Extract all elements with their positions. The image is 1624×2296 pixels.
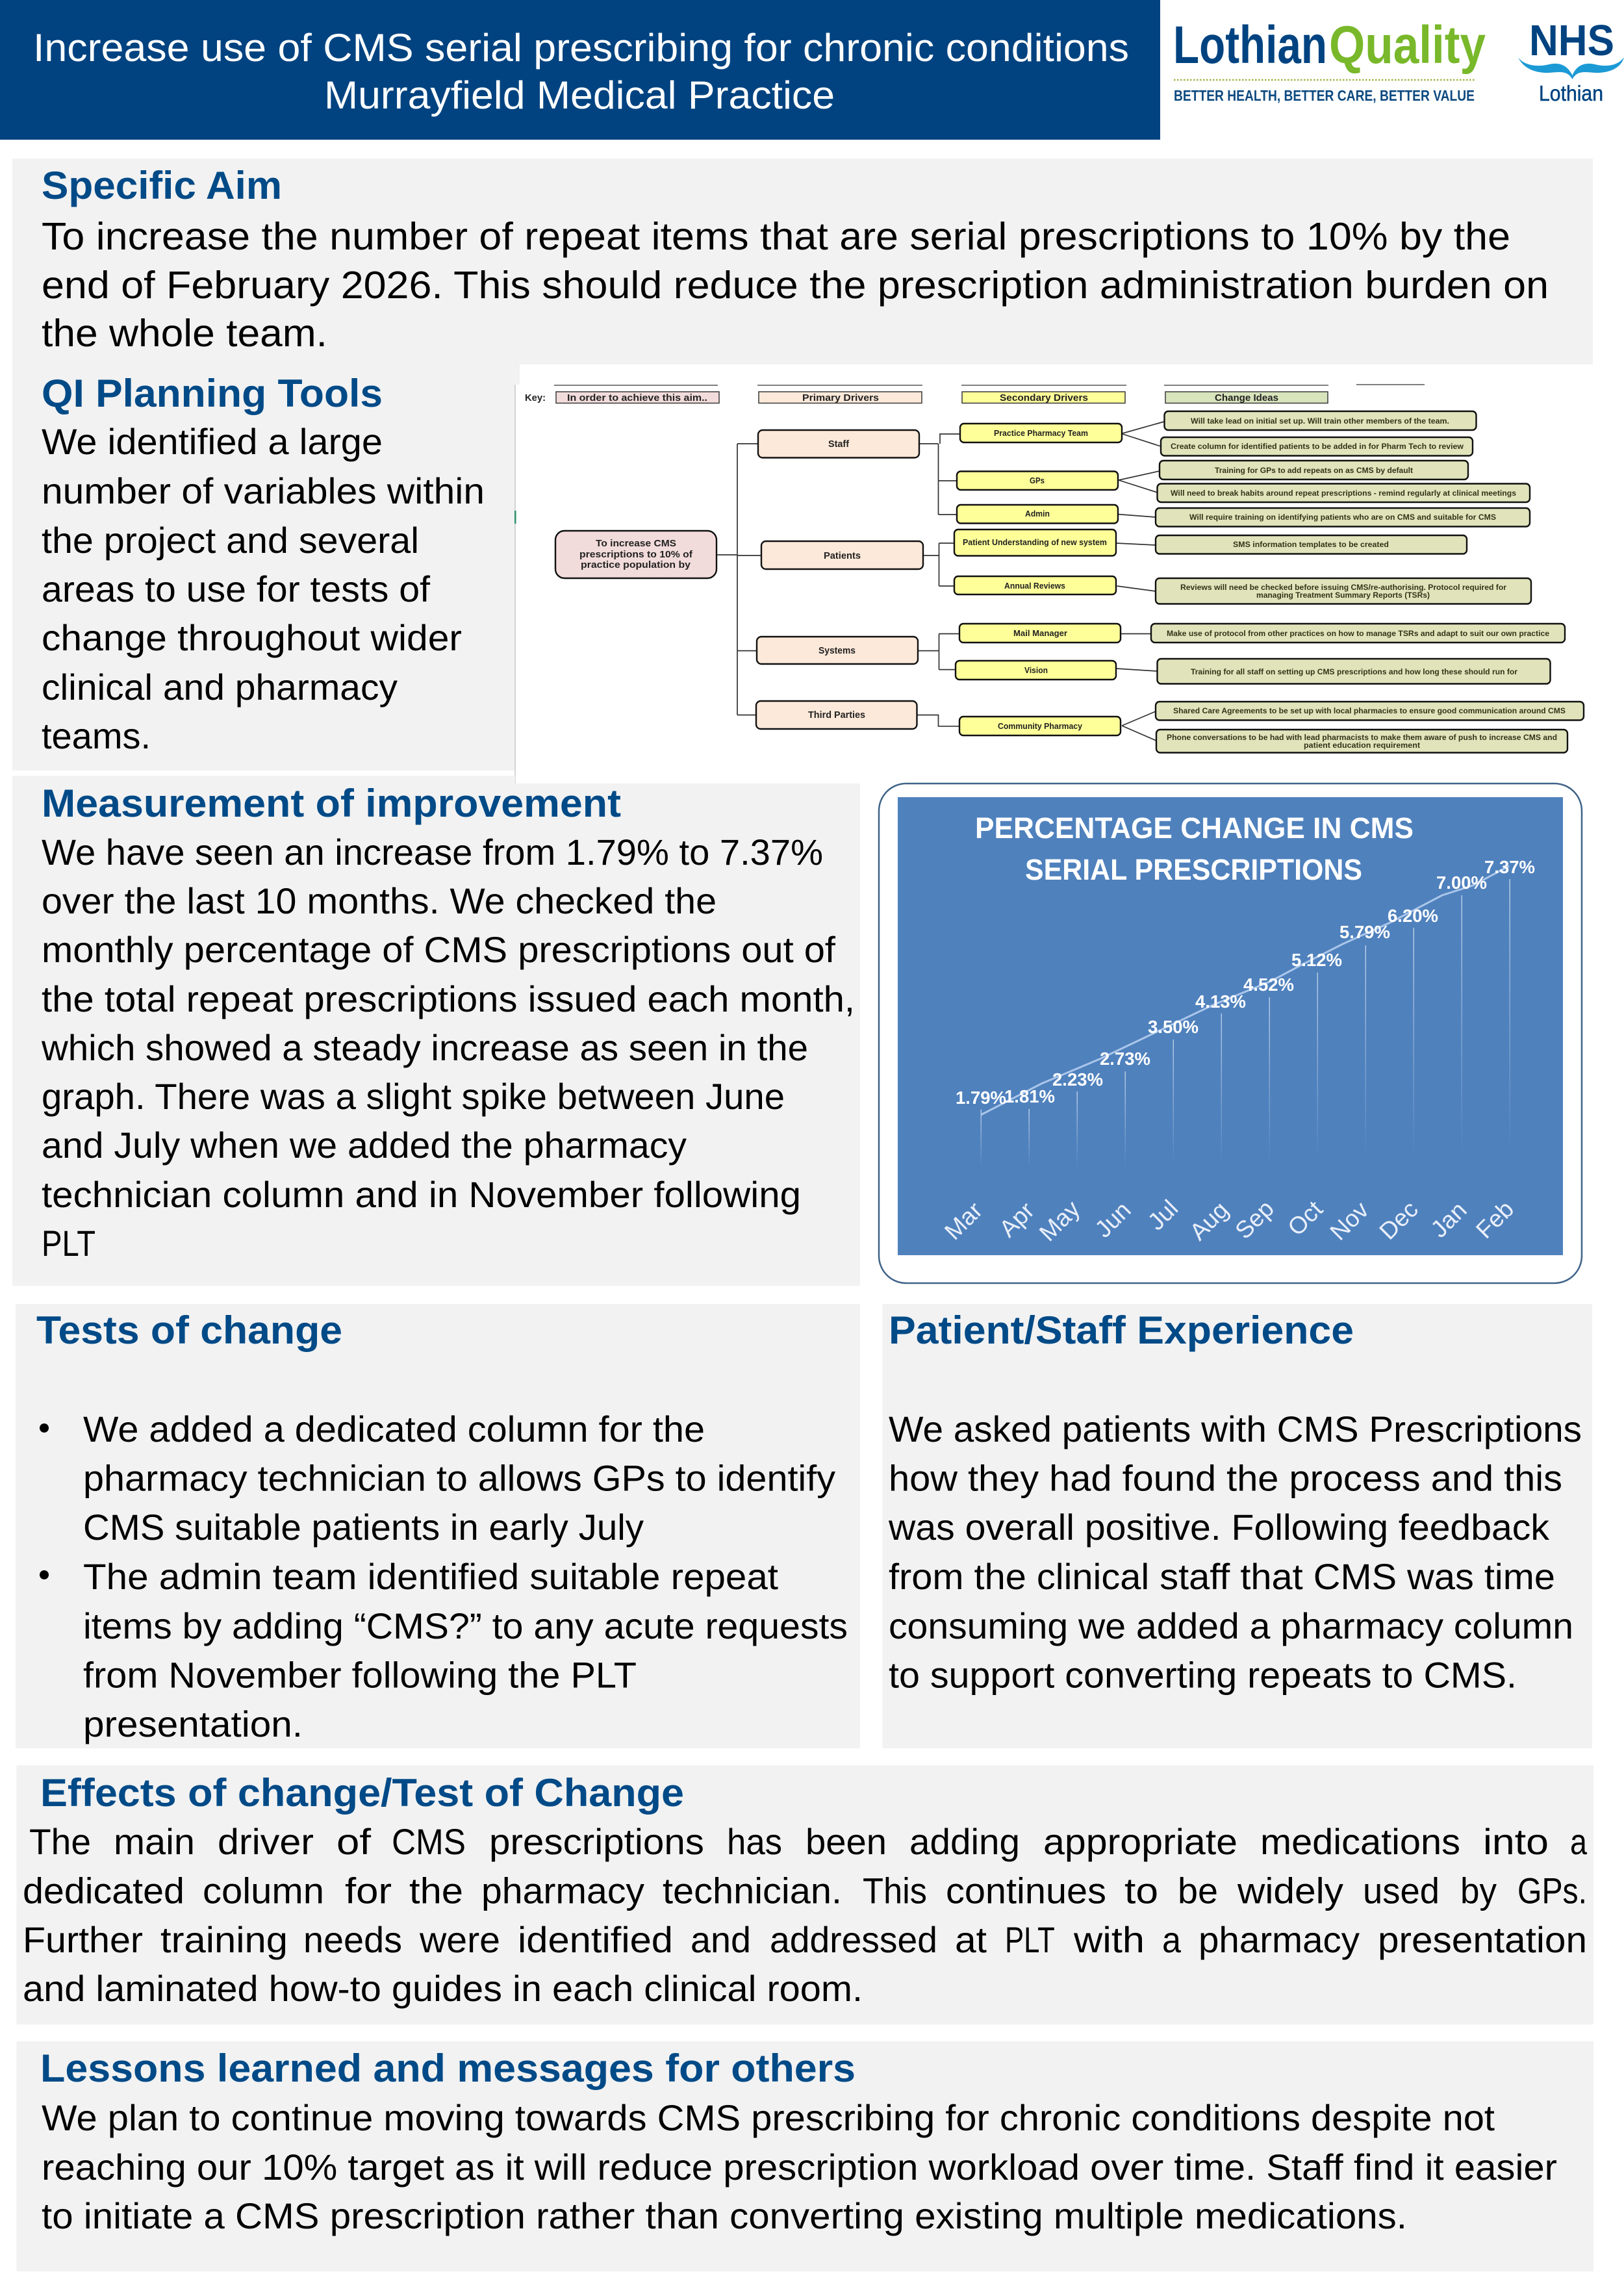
secondary drivers: GPs: [1030, 476, 1045, 485]
primary drivers: Patients: [824, 551, 861, 561]
change ideas: Shared Care Agreements to be set up with local pharmacies to ensure good communication around CMS: [1173, 706, 1566, 715]
diagram key: Secondary Drivers: [1000, 392, 1088, 403]
secondary drivers: Patient Understanding of new system: [963, 538, 1107, 547]
change ideas: Create column for identified patients to be added in for Pharm Tech to review: [1171, 442, 1464, 451]
heading: patient/staff experience: Patient/Staff Experience: [889, 1308, 1354, 1352]
logo: NHS Lothian: NHS: [1529, 16, 1614, 65]
QI planning text: areas to use for tests of: [42, 568, 430, 609]
aim text: To increase the number of repeat items that are serial prescriptions to 10% by the: [42, 215, 1510, 258]
change ideas: Training for all staff on setting up CMS prescriptions and how long these should run for: [1191, 667, 1517, 676]
secondary drivers: Practice Pharmacy Team: [994, 429, 1088, 438]
bullet: pharmacy technician column: pharmacy technician to allows GPs to identify: [83, 1458, 835, 1498]
chart month axis: Sep: [1230, 1195, 1279, 1244]
chart data labels: 1.79%: [956, 1088, 1006, 1108]
change ideas: Will need to break habits around repeat prescriptions - remind regularly at clinical meetings: [1171, 489, 1516, 498]
heading: QI planning tools: QI Planning Tools: [42, 372, 383, 415]
change ideas: managing Treatment Summary Reports (TSRs): [1256, 591, 1430, 600]
diagram key: In order to achieve this aim..: [567, 392, 707, 403]
measurement text: over the last 10 months. We checked the: [42, 880, 717, 921]
primary drivers: Staff: [828, 439, 849, 450]
secondary drivers: Mail Manager: [1013, 629, 1067, 638]
effects text: needs: [303, 1919, 402, 1960]
effects text: pharmacy: [1199, 1919, 1360, 1960]
aim box: prescriptions to 10% of: [579, 549, 693, 560]
aim box: To increase CMS: [596, 538, 676, 549]
change ideas: Make use of protocol from other practices on how to manage TSRs and adapt to suit our own practice: [1167, 629, 1549, 638]
effects text: with: [1073, 1919, 1145, 1960]
effects text: Further: [23, 1919, 143, 1960]
effects text: by: [1460, 1870, 1497, 1911]
effects text: The: [29, 1821, 91, 1862]
effects text: been: [806, 1821, 887, 1862]
chart data labels: 1.81%: [1004, 1086, 1055, 1106]
bullet: pharmacy technician column: [40, 1409, 835, 1548]
experience text: from the clinical staff that CMS was time: [889, 1556, 1555, 1597]
effects text: used: [1363, 1870, 1440, 1911]
panel: measurement of improvement: [12, 776, 860, 1286]
chart month axis: Apr: [994, 1197, 1039, 1242]
header banner: [0, 0, 1160, 140]
chart data labels: 2.23%: [1052, 1069, 1103, 1090]
panel: QI planning tools: [12, 364, 520, 771]
QI planning text: the project and several: [42, 520, 419, 561]
bullet: pharmacy technician column: We added a dedicated column for the: [83, 1409, 705, 1449]
effects text: technician.: [663, 1870, 842, 1911]
logo: Lothian Quality: Lothian: [1173, 16, 1327, 75]
effects text: be: [1178, 1870, 1218, 1911]
change ideas: Will take lead on initial set up. Will train other members of the team.: [1191, 416, 1449, 426]
chart data labels: 7.37%: [1484, 857, 1535, 877]
measurement text: technician column and in November following: [42, 1174, 801, 1215]
effects text: dedicated: [23, 1870, 184, 1911]
diagram key: Change Ideas: [1215, 392, 1278, 403]
bullet: pharmacy technician column: CMS suitable patients in early July: [83, 1507, 644, 1548]
heading: specific aim: Specific Aim: [42, 164, 282, 207]
diagram key: Key:: [525, 392, 546, 403]
chart month axis: [939, 1195, 1519, 1246]
primary drivers: [756, 430, 923, 729]
effects text: of: [336, 1821, 372, 1862]
primary drivers: Systems: [818, 646, 856, 656]
logo: Lothian Quality: [1173, 16, 1486, 104]
diagram key: [525, 392, 1328, 403]
experience text: to support converting repeats to CMS.: [889, 1654, 1517, 1696]
heading: tests of change: Tests of change: [36, 1308, 342, 1352]
logo: NHS Lothian: Lothian: [1539, 81, 1603, 105]
secondary drivers: Annual Reviews: [1004, 581, 1065, 591]
chart data labels: 4.13%: [1195, 991, 1246, 1012]
aim text: the whole team.: [42, 312, 327, 355]
effects text: continues: [946, 1870, 1106, 1911]
chart data labels: 5.12%: [1291, 950, 1342, 970]
chart data labels: 2.73%: [1100, 1049, 1150, 1069]
heading: effects of change: Effects of change/Test of Change: [40, 1771, 684, 1815]
effects text: for: [345, 1870, 392, 1911]
effects text: and: [691, 1919, 751, 1960]
change ideas: Training for GPs to add repeats on as CMS by default: [1215, 466, 1413, 475]
QI planning text: [42, 421, 485, 756]
effects text: widely: [1237, 1870, 1343, 1911]
effects text: identified: [518, 1919, 673, 1960]
aim box: practice population by: [581, 559, 691, 570]
chart month axis: Aug: [1184, 1196, 1234, 1245]
heading: measurement of improvement: Measurement of improvement: [42, 782, 621, 825]
bullet: admin team: The admin team identified suitable repeat: [83, 1556, 778, 1597]
effects text: prescriptions: [489, 1821, 704, 1862]
aim text: [42, 215, 1549, 355]
effects text: medications: [1260, 1821, 1460, 1862]
panel: lessons learned: [17, 2041, 1593, 2271]
bullet: admin team: [40, 1556, 848, 1744]
QI planning text: change throughout wider: [42, 617, 462, 658]
QI planning text: number of variables within: [42, 470, 485, 511]
connectors: [717, 422, 1164, 741]
chart month axis: Oct: [1282, 1195, 1328, 1241]
change ideas: Reviews will need be checked before issuing CMS/re-authorising. Protocol required for: [1180, 583, 1506, 592]
logo: NHS Lothian: [1518, 16, 1624, 105]
lessons text: We plan to continue moving towards CMS prescribing for chronic conditions despite not: [42, 2097, 1495, 2138]
chart data labels: [956, 857, 1535, 1108]
effects text: This: [863, 1870, 927, 1911]
effects text: GPs.: [1517, 1870, 1587, 1911]
change ideas: Will require training on identifying patients who are on CMS and suitable for CMS: [1189, 513, 1496, 522]
chart title: [975, 811, 1414, 886]
chart data labels: 6.20%: [1388, 906, 1438, 926]
effects text: has: [727, 1821, 782, 1862]
effects text: to: [1124, 1870, 1158, 1911]
change ideas: [1151, 411, 1584, 752]
change ideas: Phone conversations to be had with lead pharmacists to make them aware of push to increase CMS and: [1167, 733, 1557, 742]
secondary drivers: [954, 424, 1122, 735]
secondary drivers: Admin: [1025, 509, 1050, 518]
title: Increase use of CMS serial prescribing for chronic conditions: [33, 26, 1129, 70]
heading: lessons learned: Lessons learned and messages for others: [40, 2047, 856, 2090]
effects text: the: [409, 1870, 463, 1911]
effects text: and laminated how-to guides in each clinical room.: [23, 1968, 863, 2009]
effects text: a: [1162, 1919, 1182, 1960]
experience text: how they had found the process and this: [889, 1458, 1562, 1498]
QI planning text: teams.: [42, 715, 151, 756]
chart data labels: 5.79%: [1339, 922, 1390, 942]
lessons text: to initiate a CMS prescription rather than converting existing multiple medications.: [42, 2195, 1407, 2236]
effects text: into: [1483, 1821, 1549, 1862]
effects text: addressed: [770, 1919, 937, 1960]
effects text: pharmacy: [481, 1870, 644, 1911]
chart data labels: 4.52%: [1243, 975, 1294, 995]
measurement text: PLT: [42, 1223, 95, 1264]
effects text: driver: [218, 1821, 314, 1862]
logo: Lothian Quality: BETTER HEALTH, BETTER CARE, BETTER VALUE: [1174, 87, 1475, 104]
effects text: PLT: [1005, 1919, 1054, 1960]
effects text: presentation: [1378, 1919, 1587, 1960]
effects text: adding: [909, 1821, 1020, 1862]
measurement text: and July when we added the pharmacy: [42, 1125, 687, 1166]
secondary drivers: Vision: [1024, 666, 1048, 675]
bullet: admin team: presentation.: [83, 1703, 303, 1744]
experience text: consuming we added a pharmacy column: [889, 1605, 1573, 1646]
lessons text: [42, 2097, 1557, 2236]
measurement text: [41, 832, 855, 1264]
change ideas: SMS information templates to be created: [1233, 540, 1389, 549]
subtitle: practice name: Murrayfield Medical Practice: [324, 73, 835, 117]
measurement text: which showed a steady increase as seen in the: [41, 1027, 808, 1068]
logo: Lothian Quality: Quality: [1329, 16, 1486, 75]
chart month axis: Nov: [1325, 1196, 1374, 1245]
driver diagram: [514, 385, 1584, 784]
chart title: SERIAL PRESCRIPTIONS: [1025, 853, 1362, 886]
experience text: We asked patients with CMS Prescriptions: [889, 1409, 1582, 1449]
chart data labels: 3.50%: [1148, 1017, 1199, 1037]
chart drop lines: [981, 879, 1510, 1167]
measurement text: graph. There was a slight spike between June: [42, 1076, 785, 1117]
chart month axis: Feb: [1471, 1195, 1519, 1244]
effects text: appropriate: [1043, 1821, 1237, 1862]
panel: specific aim: [12, 159, 1593, 364]
effects text: a: [1570, 1821, 1588, 1862]
panel: effects of change: [17, 1765, 1593, 2024]
chart data line: [981, 866, 1509, 1115]
chart month axis: Dec: [1374, 1195, 1423, 1245]
panel: line chart: [879, 784, 1582, 1283]
chart month axis: May: [1034, 1195, 1085, 1246]
bullet: admin team: items by adding “CMS?” to any acute requests: [83, 1605, 848, 1646]
QI planning text: We identified a large: [42, 421, 383, 462]
lessons text: reaching our 10% target as it will reduce prescription workload over time. Staff find it easier: [42, 2147, 1557, 2188]
effects text: training: [160, 1919, 288, 1960]
aim text: end of February 2026. This should reduce the prescription administration burden on: [42, 264, 1549, 307]
chart month axis: Jun: [1090, 1197, 1136, 1243]
chart month axis: Mar: [939, 1197, 987, 1245]
effects text: were: [419, 1919, 500, 1960]
bullet: admin team: from November following the PLT: [83, 1654, 637, 1696]
chart data labels: 7.00%: [1436, 873, 1487, 893]
chart month axis: Jan: [1426, 1197, 1472, 1243]
diagram key: Primary Drivers: [802, 392, 879, 403]
effects text: at: [955, 1919, 987, 1960]
experience text: [888, 1409, 1582, 1696]
experience text: was overall positive. Following feedback: [888, 1507, 1550, 1548]
panel: tests of change: [16, 1304, 860, 1748]
chart title: PERCENTAGE CHANGE IN CMS: [975, 811, 1414, 845]
effects text: CMS: [392, 1821, 466, 1862]
measurement text: monthly percentage of CMS prescriptions out of: [42, 929, 835, 970]
primary drivers: Third Parties: [808, 710, 865, 721]
effects text: [23, 1821, 1588, 2009]
effects text: column: [203, 1870, 324, 1911]
chart month axis: Jul: [1143, 1195, 1183, 1235]
change ideas: patient education requirement: [1304, 741, 1420, 750]
aim box: [555, 531, 717, 578]
secondary drivers: Community Pharmacy: [998, 722, 1082, 731]
measurement text: the total repeat prescriptions issued each month,: [42, 978, 855, 1019]
effects text: main: [114, 1821, 195, 1862]
panel: patient/staff experience: [882, 1304, 1592, 1748]
QI planning text: clinical and pharmacy: [42, 667, 398, 708]
measurement text: We have seen an increase from 1.79% to 7.37%: [42, 832, 823, 873]
